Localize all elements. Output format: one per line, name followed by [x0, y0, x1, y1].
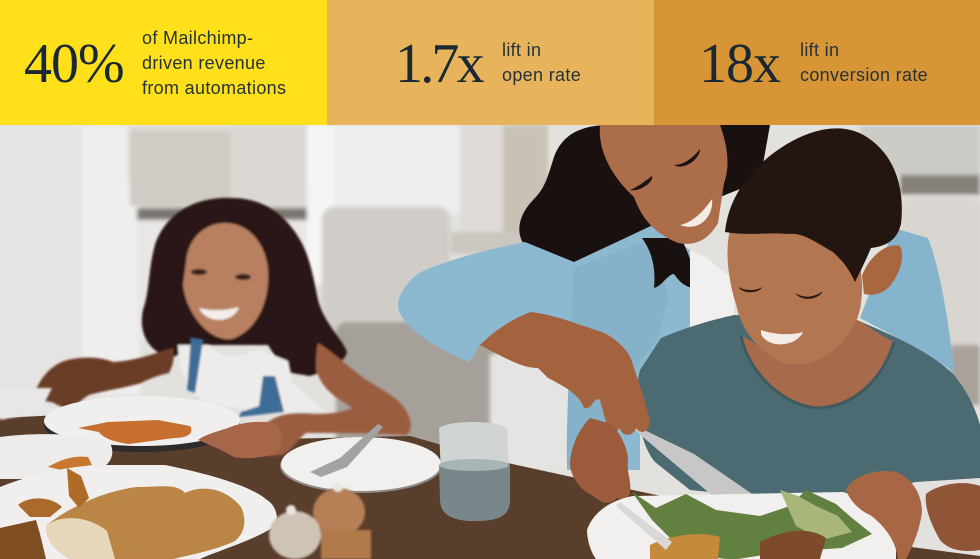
number: 40%: 40%: [24, 33, 124, 95]
salad: [632, 490, 872, 559]
chicken: [47, 486, 244, 559]
text: of Mailchimp-driven revenue from automations: of Mailchimp-: [142, 28, 253, 48]
panel: 1.7x stat: [327, 0, 654, 125]
text: of Mailchimp-driven revenue from automations: [142, 28, 286, 98]
boy: [637, 128, 980, 505]
overall straps: [187, 338, 284, 417]
woman's second hand: [570, 418, 630, 503]
water glass: [439, 422, 510, 521]
table: [0, 415, 980, 559]
hair: [142, 198, 347, 376]
girl's hand over plate edge: [198, 422, 282, 458]
chairs and sofa: [322, 197, 980, 468]
white inner shirt: [690, 250, 734, 334]
text: lift in open rate: open rate: [502, 65, 581, 85]
boy's hand: [846, 471, 922, 559]
woman: [398, 125, 954, 470]
shirt shading: [567, 238, 668, 468]
face: [600, 125, 727, 244]
text: lift in conversion rate: conversion rate: [800, 65, 928, 85]
empty plate with fork: [280, 424, 442, 493]
number: 1.7x: 1.7x: [395, 33, 482, 95]
hanging curls: [642, 238, 695, 288]
text: of Mailchimp-driven revenue from automations: from automations: [142, 78, 286, 98]
platter: roast chicken: [0, 465, 277, 559]
tongs: [545, 358, 758, 508]
text: lift in open rate: lift in: [502, 40, 541, 60]
text: lift in conversion rate: lift in: [800, 40, 839, 60]
shirt body and left sleeve: [398, 225, 690, 470]
food on plate: [650, 534, 720, 559]
shirt: [637, 315, 980, 505]
smile: [680, 199, 712, 227]
girl: [35, 198, 411, 456]
girl's left arm and hand: [228, 343, 411, 456]
mother's other hand: [926, 483, 980, 551]
text: lift in conversion rate: [800, 40, 928, 85]
eyes: [191, 269, 207, 275]
salad plate: [587, 490, 896, 559]
number: 18x: 18x: [699, 33, 780, 95]
photo: family sharing a meal at a table: [0, 125, 980, 559]
serving knife: [616, 502, 672, 550]
smile: [199, 307, 239, 320]
eyes: [630, 149, 700, 190]
bowl with food: [0, 434, 112, 479]
smile: [761, 330, 803, 344]
hair: [519, 125, 770, 289]
hair: [725, 128, 902, 282]
text: lift in open rate: [502, 40, 581, 85]
girl's right arm and hand: [35, 348, 174, 415]
right shirt side: [860, 228, 954, 372]
woman's forearm and hand holding tongs: [480, 312, 650, 435]
face: [728, 228, 862, 365]
white top: [178, 345, 324, 414]
eyes: [738, 287, 823, 299]
face: [183, 223, 268, 339]
girl's plate: [44, 396, 240, 452]
panel: 18x stat: [654, 0, 980, 125]
panel: 40% stat: [0, 0, 327, 125]
neck: [741, 318, 894, 408]
text: of Mailchimp-driven revenue from automations: driven revenue: [142, 53, 266, 73]
collar line: [741, 335, 894, 408]
salt and pepper shakers: [269, 482, 371, 559]
potatoes: [67, 468, 89, 508]
room background: [0, 115, 980, 559]
ear: [862, 245, 902, 295]
far-left plate: [0, 388, 52, 420]
